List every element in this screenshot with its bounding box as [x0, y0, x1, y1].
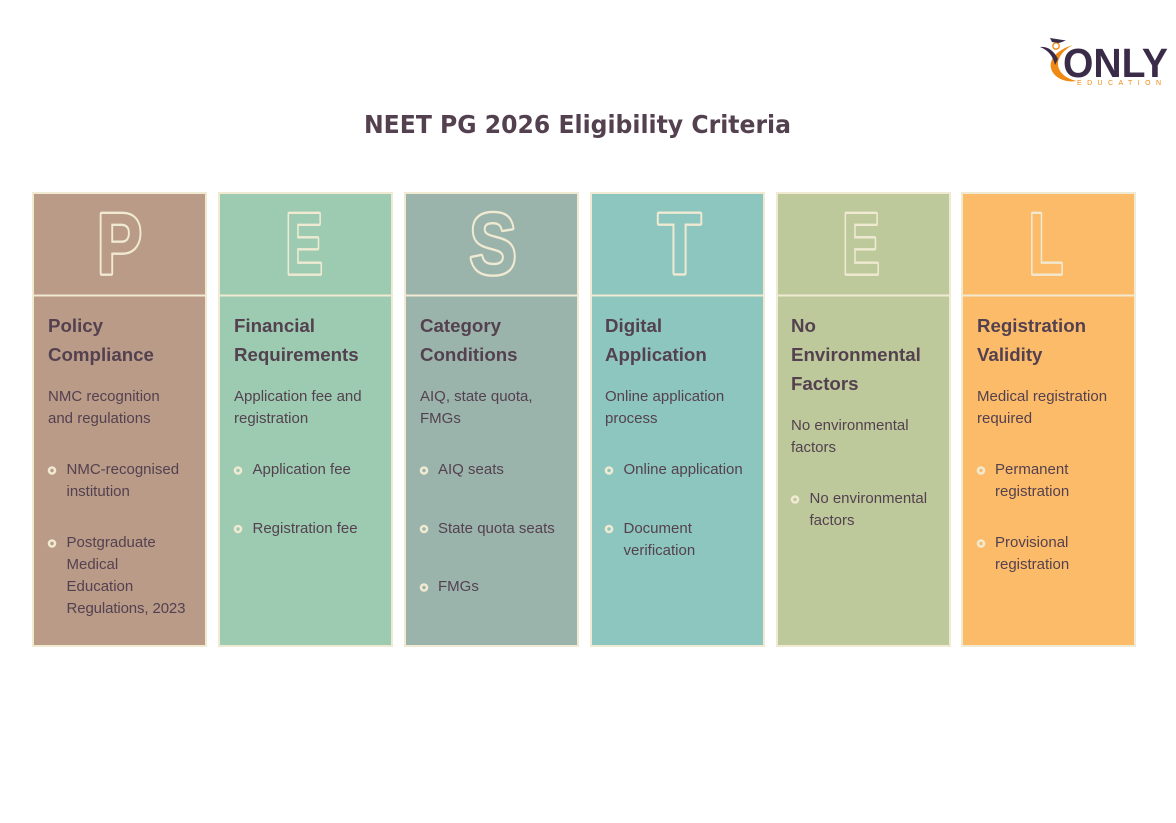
bullet: AIQ seats: AIQ seats	[438, 461, 504, 478]
description: and regulations	[48, 410, 151, 427]
logo: Only Education: ONLY	[1063, 40, 1168, 86]
bullet: No environmental factors	[792, 490, 927, 529]
panel: S Category Conditions	[405, 193, 578, 646]
heading: Validity	[977, 344, 1043, 365]
letter S: S	[469, 196, 517, 292]
bullet: Postgraduate Medical Education Regulations	[49, 534, 186, 617]
logo: Only Education: EDUCATION	[1077, 80, 1161, 87]
heading: Digital	[605, 315, 662, 336]
description: process	[605, 410, 658, 427]
bullet: NMC-recognised institution: NMC-recognised	[66, 461, 179, 478]
heading: Factors	[791, 373, 859, 394]
description: registration	[234, 410, 308, 427]
heading: Compliance	[48, 344, 154, 365]
heading: Requirements	[234, 344, 359, 365]
heading: Financial	[234, 315, 315, 336]
bullet: Postgraduate Medical Education Regulations: Medical	[66, 556, 118, 573]
bullet: Provisional registration: Provisional	[995, 534, 1068, 551]
bullet: Online application: Online application	[624, 461, 743, 478]
bullet: NMC-recognised institution: institution	[66, 483, 130, 500]
description: No environmental	[791, 417, 909, 434]
bullet: No environmental factors: No environmental	[810, 490, 927, 507]
panel: T Digital Application	[591, 193, 764, 646]
bullet: Document verification: verification	[624, 542, 695, 559]
description: FMGs	[420, 410, 461, 427]
panel: E No Environmental Factors	[777, 193, 950, 646]
bullet: NMC-recognised institution	[49, 461, 179, 500]
heading: Policy	[48, 315, 104, 336]
bullet: Document verification: Document	[624, 520, 693, 537]
letter E: E	[842, 196, 880, 292]
letter P: P	[97, 197, 142, 292]
heading: Category	[420, 315, 502, 336]
description: required	[977, 410, 1032, 427]
bullet: Postgraduate Medical Education Regulations: Education	[66, 578, 133, 595]
bullet: Registration fee: Registration fee	[252, 520, 358, 537]
bullet: Permanent registration: registration	[995, 483, 1069, 500]
bullet: State quota seats: State quota seats	[438, 520, 555, 537]
bullet: Permanent registration: Permanent	[995, 461, 1069, 478]
letter L: L	[1029, 196, 1063, 292]
description: Application fee and	[234, 388, 362, 405]
heading: No	[791, 315, 816, 336]
panel: P Policy Compliance	[33, 193, 206, 646]
bullet: No environmental factors: factors	[810, 512, 855, 529]
bullet: Provisional registration	[978, 534, 1069, 573]
letter E: E	[285, 196, 323, 292]
letter T: T	[658, 196, 701, 292]
description: AIQ, state quota,	[420, 388, 533, 405]
bullet: Postgraduate Medical Education Regulations: Regulations, 2023	[66, 600, 186, 617]
bullet: Application fee: Application fee	[252, 461, 351, 478]
heading: Conditions	[420, 344, 518, 365]
description: Online application	[605, 388, 724, 405]
panel: E Financial Requirements	[219, 193, 392, 646]
heading: Registration	[977, 315, 1086, 336]
bullet: Postgraduate Medical Education Regulations: Postgraduate	[66, 534, 156, 551]
bullet: Provisional registration: registration	[995, 556, 1069, 573]
bullet: Permanent registration	[978, 461, 1069, 500]
heading: Application	[605, 344, 707, 365]
panel: L Registration Validity	[962, 193, 1135, 646]
bullet: FMGs: FMGs	[438, 578, 479, 595]
description: factors	[791, 439, 836, 456]
description: NMC recognition	[48, 388, 160, 405]
heading: Environmental	[791, 344, 921, 365]
title: NEET PG 2026 Eligibility Criteria	[364, 110, 791, 139]
description: Medical registration	[977, 388, 1107, 405]
bullet: Document verification	[606, 520, 695, 559]
